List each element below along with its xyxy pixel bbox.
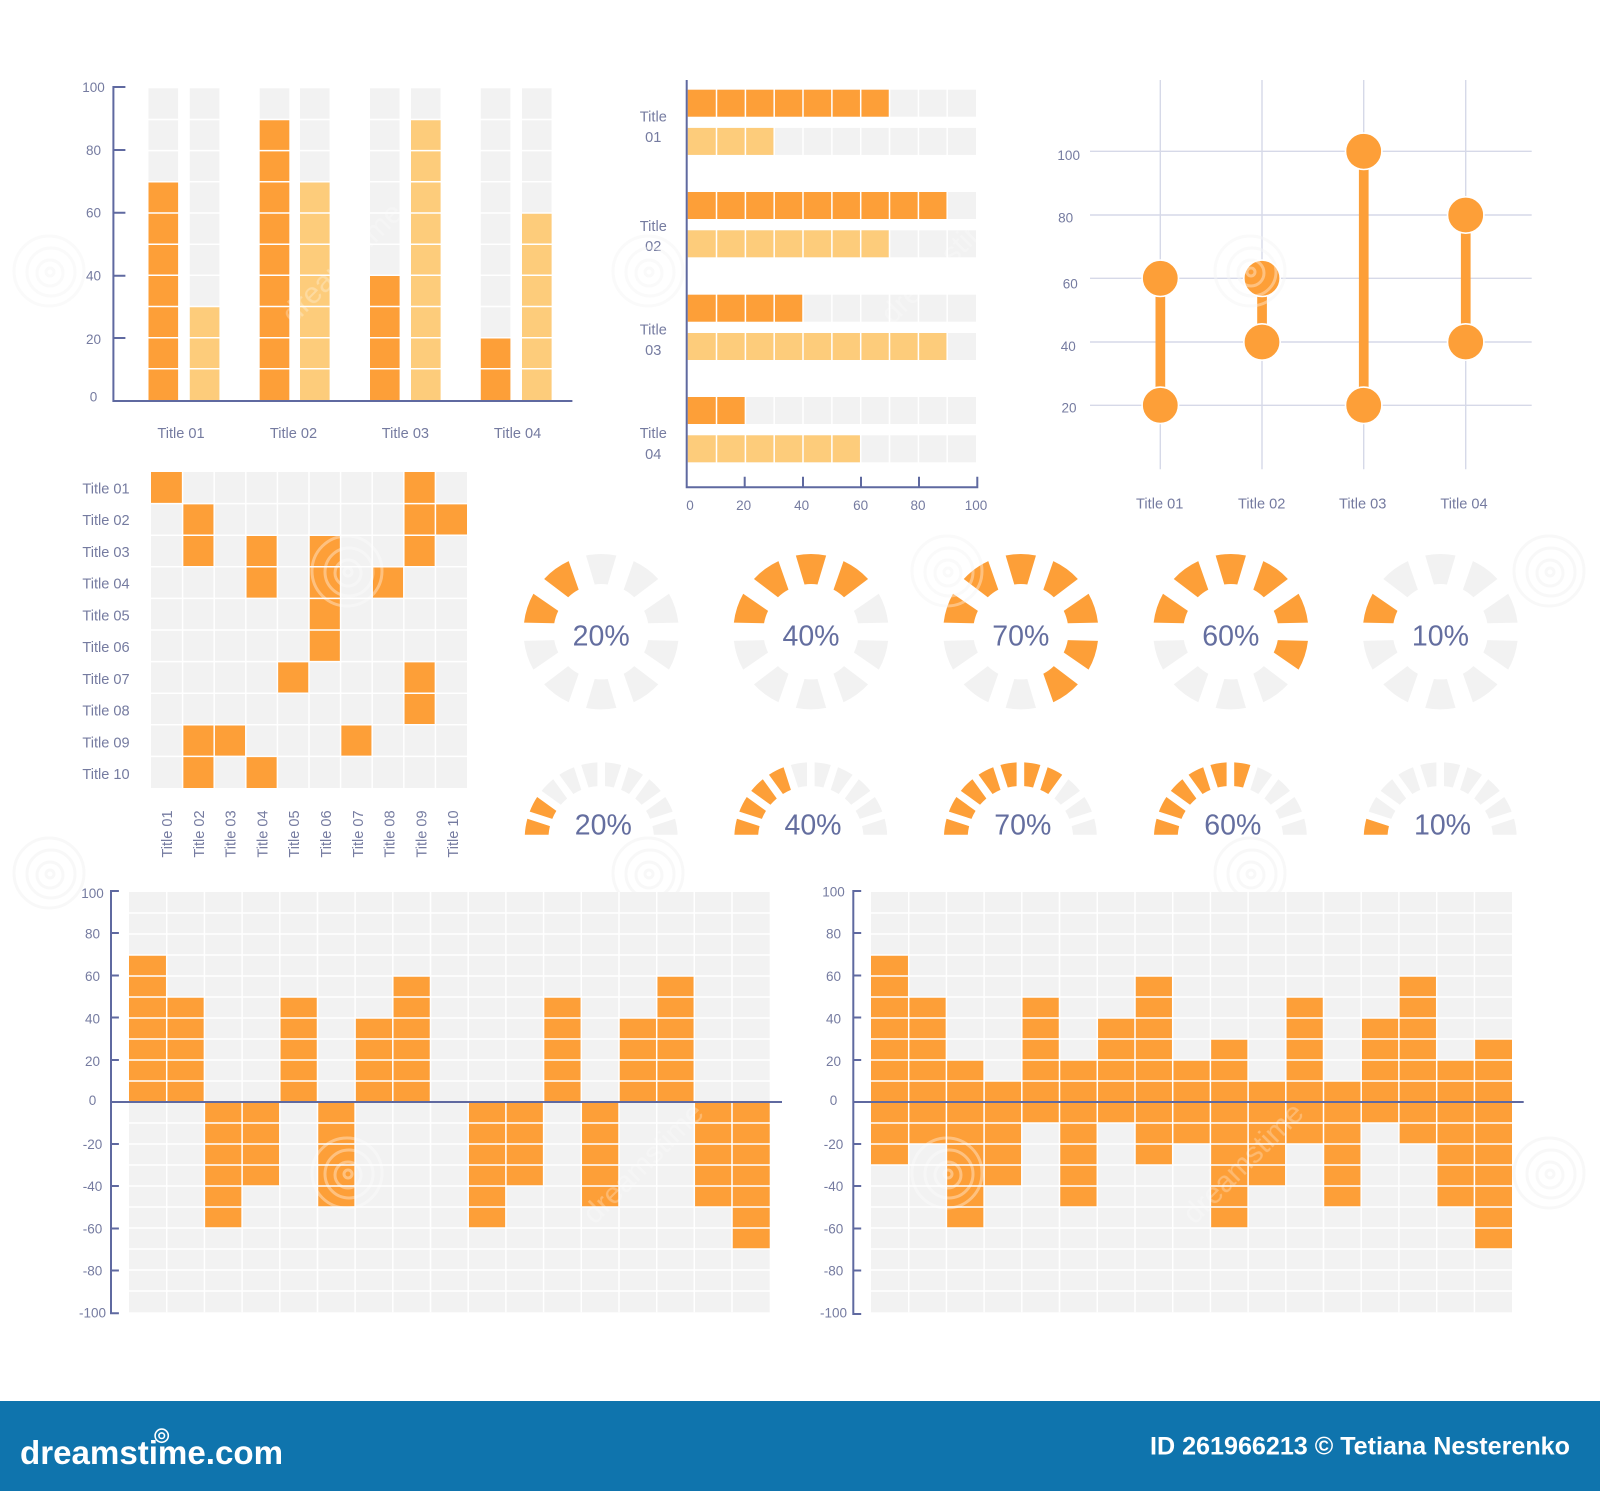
x axis labels: [686, 498, 987, 513]
row labels: [82, 482, 130, 783]
y axis labels: 80: [86, 143, 101, 158]
track columns: [148, 88, 552, 400]
ring gauge 10%: 10%: [1412, 620, 1469, 652]
column labels: Title 07: [351, 810, 367, 858]
dark orange bars: [688, 90, 947, 424]
row labels: 01: [645, 130, 661, 146]
x axis labels: 80: [910, 498, 926, 513]
dumbbell: Title 02: [1244, 260, 1280, 360]
filled cells: [151, 472, 467, 788]
axes: [111, 891, 782, 1313]
y axis labels: 100: [822, 885, 845, 900]
row labels: Title 05: [82, 608, 130, 624]
orange columns: [129, 955, 770, 1249]
watermark overlay: dreamstime: [275, 196, 409, 330]
y axis labels: 60: [86, 206, 101, 221]
dumbbell: Title 03: [1346, 133, 1382, 423]
panel: heatmap matrix: [82, 472, 467, 858]
ring gauge 60%: [1152, 554, 1309, 709]
axes: [687, 80, 977, 487]
y axis labels: -100: [820, 1306, 847, 1321]
column labels: Title 03: [224, 810, 240, 858]
x axis labels: Title 03: [1339, 496, 1386, 512]
panel: grouped vertical bar chart: [82, 80, 572, 442]
x axis labels: Title 02: [1238, 496, 1285, 512]
ring gauge 40%: [732, 554, 890, 709]
y axis labels: 20: [826, 1054, 841, 1069]
x axis labels: Title 01: [1136, 496, 1183, 512]
x axis labels: 20: [736, 498, 751, 513]
y axis labels: -80: [83, 1264, 102, 1279]
row labels: 03: [645, 343, 661, 359]
row labels: Title: [640, 219, 667, 235]
footer banner: [0, 1401, 1600, 1491]
column labels: Title 06: [319, 810, 335, 858]
x axis labels: Title 04: [494, 426, 541, 442]
row labels: [640, 110, 667, 463]
y axis labels: 60: [85, 969, 100, 984]
x axis labels: [1136, 496, 1488, 512]
column labels: [160, 810, 462, 858]
y axis labels: 60: [826, 969, 841, 984]
y axis labels: 40: [86, 269, 101, 284]
watermark overlay: [14, 196, 1310, 1230]
column labels: Title 02: [192, 810, 208, 858]
x axis labels: Title 04: [1440, 496, 1488, 512]
row labels: Title 07: [82, 672, 130, 688]
y axis labels: 40: [826, 1011, 841, 1026]
x axis labels: [157, 426, 541, 442]
panel: diverging column chart, left: [79, 886, 782, 1321]
column labels: Title 05: [287, 810, 303, 858]
y axis labels: [820, 885, 847, 1321]
ring gauge 20%: [523, 554, 680, 709]
watermark overlay: dreamstime: [1176, 1096, 1310, 1230]
column labels: Title 08: [383, 810, 399, 858]
logo wordmark: dreamstime.com: [20, 1434, 283, 1471]
row labels: Title 08: [82, 704, 130, 720]
y axis labels: 20: [86, 332, 101, 347]
row labels: 04: [645, 447, 661, 463]
y axis labels: -100: [79, 1306, 106, 1321]
row labels: Title 09: [82, 736, 130, 752]
row labels: Title: [640, 426, 667, 442]
orange columns: [871, 955, 1512, 1249]
row labels: 02: [645, 239, 661, 255]
y axis labels: 60: [1063, 276, 1078, 291]
column labels: Title 04: [255, 810, 271, 858]
watermark overlay: dreamstime: [576, 1096, 710, 1230]
semicircle gauge 20%: [524, 762, 678, 842]
ring gauge 60%: 60%: [1202, 620, 1259, 652]
y axis labels: [1057, 148, 1080, 415]
x axis labels: 40: [794, 498, 809, 513]
watermark overlay: dreamstime: [874, 196, 1008, 330]
column labels: Title 09: [414, 810, 430, 858]
semicircle gauge 60%: [1154, 762, 1307, 842]
y axis labels: 40: [85, 1011, 100, 1026]
dumbbell: Title 04: [1448, 197, 1484, 360]
row labels: Title: [640, 110, 667, 126]
semicircle gauge 40%: 40%: [784, 810, 842, 842]
y axis labels: 0: [90, 390, 97, 405]
row labels: Title: [640, 322, 667, 338]
icon: logo spiral: [155, 1429, 168, 1442]
x axis labels: 0: [686, 498, 694, 513]
panel: segmented ring gauges: [523, 554, 1519, 709]
y axis labels: -40: [83, 1179, 102, 1194]
x axis labels: Title 02: [270, 426, 317, 442]
semicircle gauge 70%: [944, 762, 1097, 842]
grid background: [129, 892, 770, 1312]
grid background: [871, 892, 1512, 1312]
column labels: Title 01: [160, 810, 176, 858]
semicircle gauge 20%: 20%: [575, 810, 632, 842]
axes: [853, 891, 1524, 1314]
semicircle gauge 40%: [734, 762, 888, 842]
y axis labels: -60: [83, 1222, 102, 1237]
ring gauge 70%: 70%: [992, 620, 1049, 652]
ring gauge 10%: [1362, 554, 1519, 709]
panel: segmented semicircle gauges: [524, 762, 1517, 842]
y axis labels: 80: [1058, 210, 1073, 225]
row labels: Title 06: [82, 640, 130, 656]
row labels: Title 03: [82, 545, 130, 561]
y axis labels: -20: [83, 1137, 102, 1152]
watermark spirals: faint on white: [14, 236, 1584, 1208]
x axis labels: Title 03: [382, 426, 429, 442]
semicircle gauge 10%: 10%: [1414, 810, 1471, 842]
ring gauge 40%: 40%: [782, 620, 840, 652]
panel: dumbbell range chart: [1057, 80, 1532, 512]
semicircle gauge 70%: 70%: [994, 810, 1051, 842]
y axis labels: [79, 886, 106, 1321]
y axis labels: [82, 80, 105, 405]
semicircle gauge 60%: 60%: [1204, 810, 1261, 842]
y axis labels: 20: [85, 1054, 100, 1069]
ring gauge 70%: [942, 554, 1099, 709]
y axis labels: 100: [1057, 148, 1080, 163]
image credit: ID 261966213 © Tetiana Nesterenko: [1150, 1432, 1570, 1460]
y axis labels: -80: [824, 1264, 843, 1279]
y axis labels: -20: [824, 1137, 843, 1152]
row labels: Title 04: [82, 577, 130, 593]
x axis labels: Title 01: [157, 426, 205, 442]
y axis labels: 80: [826, 926, 841, 941]
x axis labels: 100: [965, 498, 987, 513]
row labels: Title 10: [82, 767, 130, 783]
track rows: [688, 90, 976, 462]
y axis labels: 100: [82, 80, 105, 95]
matrix background: [151, 472, 467, 788]
ring gauge 20%: 20%: [573, 620, 630, 652]
y axis labels: 80: [85, 926, 100, 941]
row labels: Title 01: [82, 482, 130, 498]
y axis labels: -40: [824, 1179, 843, 1194]
axes: [113, 87, 572, 401]
y axis labels: 0: [89, 1093, 96, 1108]
grid lines: [1090, 80, 1532, 469]
light orange bars: [688, 128, 947, 462]
y axis labels: 40: [1061, 339, 1076, 354]
y axis labels: 100: [81, 886, 104, 901]
light orange bars: [190, 120, 552, 400]
x axis labels: 60: [853, 498, 868, 513]
panel: grouped horizontal bar chart: [640, 80, 987, 513]
dumbbell: Title 01: [1142, 260, 1179, 423]
y axis labels: -60: [824, 1222, 843, 1237]
row labels: Title 02: [82, 513, 130, 529]
panel: diverging column chart, right: [820, 885, 1524, 1321]
y axis labels: 20: [1061, 400, 1077, 415]
dark orange bars: [148, 120, 510, 400]
y axis labels: 0: [830, 1093, 837, 1108]
semicircle gauge 10%: [1363, 762, 1517, 842]
column labels: Title 10: [446, 810, 462, 858]
